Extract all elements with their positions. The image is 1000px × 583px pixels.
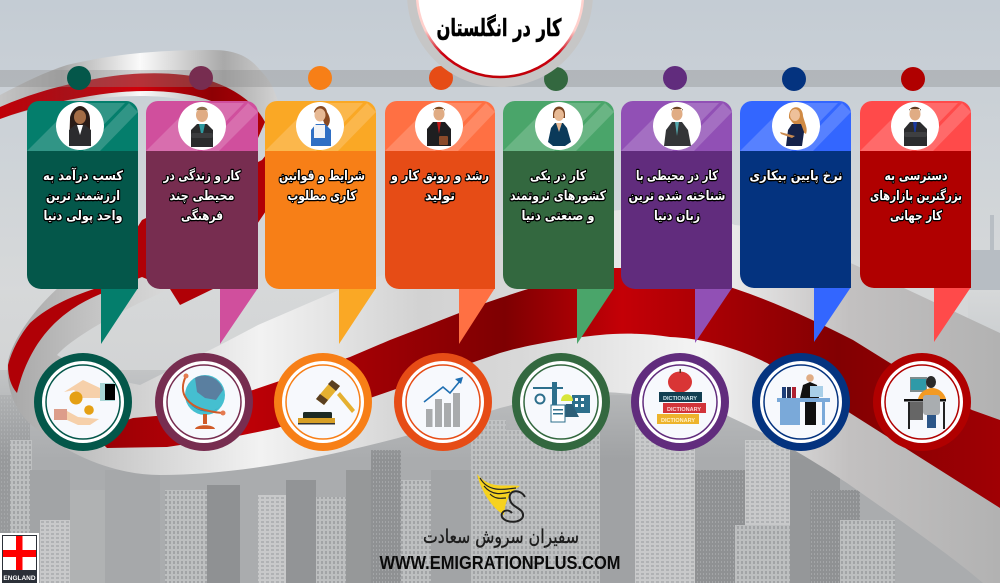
card 1 text: واحد پولی دنیا	[44, 209, 122, 224]
title: کار در انگلستان	[436, 14, 562, 42]
icon: growth chart	[394, 353, 492, 451]
ribbon: lower red band	[90, 268, 1000, 508]
icon: apple on dictionaries: DICTIONARY	[663, 396, 697, 402]
card 5 text: کشورهای ثروتمند	[510, 189, 606, 204]
card 8 text: دسترسی به	[884, 169, 948, 184]
avatar: woman in navy suit	[548, 106, 571, 146]
card 3 text: شرایط و قوانین	[279, 169, 365, 184]
card 8 text	[870, 169, 962, 224]
card 5 text: کار در یکی	[530, 169, 586, 184]
panel: card 6 purple	[621, 101, 732, 343]
card 2 text: فرهنگی	[181, 208, 223, 224]
panel: card 1 teal	[27, 101, 138, 344]
timeline dots	[67, 66, 925, 91]
avatar: man with briefcase	[427, 107, 451, 146]
icon: person at computer	[873, 353, 971, 451]
avatar: woman with notebook	[780, 107, 807, 146]
ribbon: upper red band	[0, 73, 265, 138]
ribbon: lower white sweep	[8, 208, 1000, 583]
title badge	[407, 0, 593, 87]
panel: card 3 orange	[265, 101, 376, 344]
card 2 text: محیطی چند	[170, 189, 234, 204]
avatar: man with teal tie	[664, 107, 691, 146]
panel: card 7 blue	[740, 101, 851, 342]
card 5 text	[510, 169, 606, 224]
card 8 text: کار جهانی	[890, 209, 942, 224]
card 6 text: شناخته شده ترین	[628, 189, 726, 204]
card 6 text	[628, 169, 726, 224]
card 4 text: تولید	[425, 189, 455, 204]
card 7 text: نرخ پایین بیکاری	[750, 169, 842, 184]
avatar: man with glasses	[191, 107, 213, 147]
ribbon: diagonal red band	[8, 150, 270, 393]
website url: WWW.EMIGRATIONPLUS.COM	[380, 553, 620, 573]
ribbon: upper white swoosh	[0, 50, 280, 130]
logo: swan wing emblem	[477, 474, 525, 522]
icon: construction and industry	[512, 353, 610, 451]
card 3 text: کاری مطلوب	[288, 189, 357, 204]
panel: card 2 magenta	[146, 101, 258, 344]
flag: England	[0, 533, 39, 583]
icon: employee at desk	[752, 353, 850, 451]
card 2 text	[163, 168, 241, 224]
card 6 text: زبان دنیا	[654, 209, 700, 224]
card 1 text: کسب درآمد به	[43, 167, 123, 184]
card 4 text	[390, 169, 489, 204]
icon: gavel	[274, 353, 372, 451]
icon: globe	[155, 353, 253, 451]
panel: card 8 red	[860, 101, 971, 342]
horizontal timeline band	[0, 70, 1000, 87]
card 5 text: و صنعتی دنیا	[522, 209, 594, 224]
card 1 text	[43, 167, 123, 224]
panel: card 4 red-orange	[385, 101, 495, 344]
icon: apple on dictionaries: DICTIONARY	[667, 407, 701, 413]
card 6 text: کار در محیطی با	[636, 169, 718, 184]
avatar: woman in dark suit	[69, 106, 91, 146]
card 2 text: کار و زندگی در	[163, 168, 241, 184]
avatar: woman holding papers	[311, 106, 331, 146]
avatar: man with crossed arms	[904, 107, 927, 146]
panel: card 5 green	[503, 101, 614, 344]
flag: England: ENGLAND	[3, 575, 36, 582]
card 8 text: بزرگترین بازارهای	[870, 188, 962, 204]
icon: hands exchanging coins	[34, 353, 132, 451]
icon: apple on dictionaries: DICTIONARY	[661, 418, 695, 424]
card 1 text: ارزشمند ترین	[46, 189, 120, 204]
logo: company name: سفیران سروش سعادت	[423, 526, 579, 548]
card 3 text	[279, 169, 365, 204]
card 4 text: رشد و رونق کار و	[390, 169, 489, 184]
icon: apple on dictionaries	[631, 353, 729, 451]
